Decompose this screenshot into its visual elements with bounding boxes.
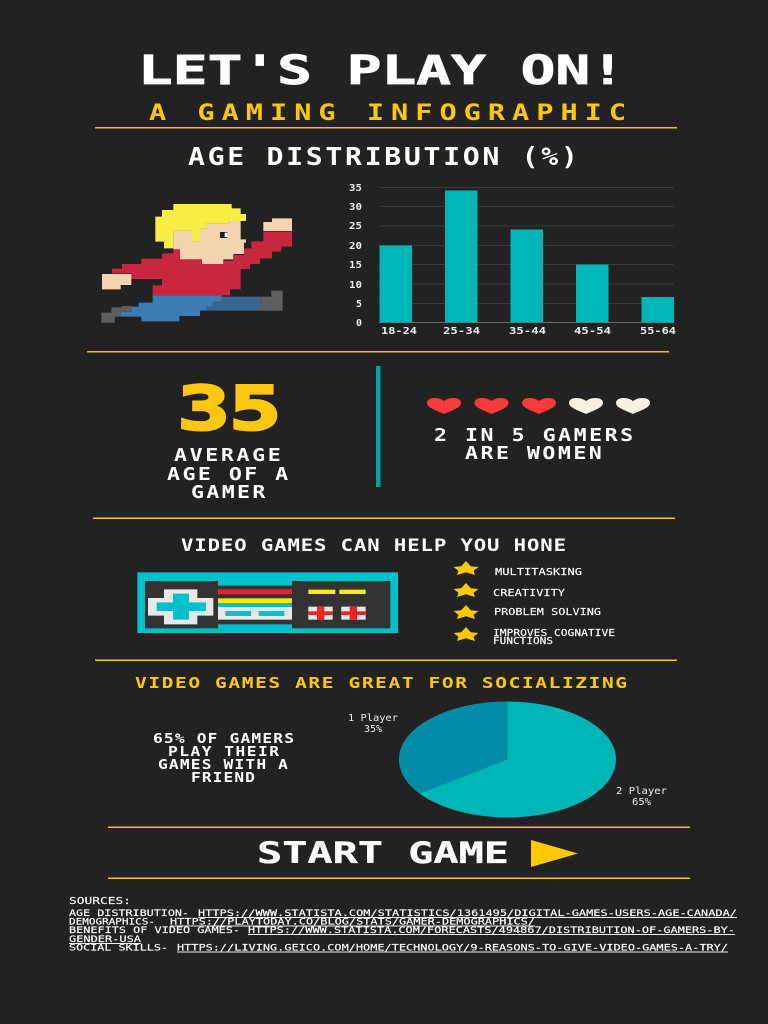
list: skills with stars: IMPROVES COGNATIVE xyxy=(493,628,615,639)
sources xyxy=(69,896,737,954)
stat: average age: GAMER xyxy=(191,482,265,503)
heading: age distribution: AGE DISTRIBUTION (%) xyxy=(188,143,578,171)
pie chart: players: 1 Player xyxy=(348,713,398,724)
stat: average age: AVERAGE xyxy=(174,445,281,466)
sources: HTTPS://PLAYTODAY.CO/BLOG/STATS/GAMER-DEMOGRAPHICS/ xyxy=(170,918,535,928)
list: skills with stars xyxy=(454,561,615,647)
bar chart: age distribution: 35-44 xyxy=(509,326,546,337)
bar chart: age distribution: 15 xyxy=(349,260,362,271)
stat: average age xyxy=(167,374,288,503)
sources: HTTPS://WWW.STATISTA.COM/STATISTICS/1361495/DIGITAL-GAMES-USERS-AGE-CANADA/ xyxy=(198,909,737,919)
heading: video games can help: VIDEO GAMES CAN HELP YOU HONE xyxy=(181,537,566,555)
start game label: START GAME xyxy=(257,836,509,870)
text: 65% of gamers: GAMES WITH A xyxy=(158,756,288,773)
bar chart: age distribution: 25 xyxy=(349,221,362,232)
pie chart: players: 35% xyxy=(364,724,382,735)
icon: game controller xyxy=(137,572,398,633)
list: skills with stars: PROBLEM SOLVING xyxy=(494,607,601,618)
stat: average age: AGE OF A xyxy=(167,464,288,485)
sources: GENDER-USA xyxy=(69,935,141,945)
text: 65% of gamers xyxy=(153,730,294,786)
sources: DEMOGRAPHICS- xyxy=(69,918,155,928)
bar chart: age distribution: 30 xyxy=(349,202,362,213)
sources: SOURCES: xyxy=(69,896,131,907)
pie chart: players: 2 Player xyxy=(616,786,667,797)
bar chart: age distribution: 55-64 xyxy=(640,326,676,337)
list: skills with stars: CREATIVITY xyxy=(493,588,565,599)
subtitle: A GAMING INFOGRAPHIC xyxy=(149,100,626,126)
pie chart: players: 65% xyxy=(632,797,651,808)
heading: socializing: VIDEO GAMES ARE GREAT FOR SOCIALIZING xyxy=(135,675,627,692)
icon: five hearts xyxy=(427,398,650,414)
stat: women gamers: 2 IN 5 GAMERS xyxy=(434,425,633,446)
stat: women gamers: ARE WOMEN xyxy=(465,443,602,464)
list: skills with stars: MULTITASKING xyxy=(495,567,582,578)
bar chart: age distribution: 45-54 xyxy=(574,326,611,337)
sources: SOCIAL SKILLS- xyxy=(69,944,168,954)
bar chart: age distribution: 35 xyxy=(349,183,362,194)
list: skills with stars: FUNCTIONS xyxy=(493,636,553,647)
sources: HTTPS://LIVING.GEICO.COM/HOME/TECHNOLOGY/9-REASONS-TO-GIVE-VIDEO-GAMES-A-TRY/ xyxy=(177,944,728,954)
text: 65% of gamers: 65% OF GAMERS xyxy=(153,730,294,747)
bar chart: age distribution: 5 xyxy=(356,299,362,310)
icon: play arrow xyxy=(531,840,578,867)
bar chart: age distribution xyxy=(349,183,676,337)
bar chart: age distribution: 10 xyxy=(349,280,362,291)
title: LET'S PLAY ON! xyxy=(138,48,625,94)
stat: women gamers xyxy=(434,425,633,464)
icon: running pixel character xyxy=(101,204,292,323)
sources: BENEFITS OF VIDEO GAMES- xyxy=(69,926,240,936)
sources: HTTPS://WWW.STATISTA.COM/FORECASTS/494867/DISTRIBUTION-OF-GAMERS-BY- xyxy=(248,926,735,936)
bar chart: age distribution: 25-34 xyxy=(443,326,480,337)
bar chart: age distribution: 0 xyxy=(356,318,362,329)
stat: average age: 35 xyxy=(178,374,281,444)
bar chart: age distribution: 18-24 xyxy=(381,326,417,337)
text: 65% of gamers: PLAY THEIR xyxy=(168,743,279,760)
bar chart: age distribution: 20 xyxy=(349,241,362,252)
pie chart: players xyxy=(348,702,667,818)
sources: AGE DISTRIBUTION- xyxy=(69,909,189,919)
text: 65% of gamers: FRIEND xyxy=(191,769,255,786)
